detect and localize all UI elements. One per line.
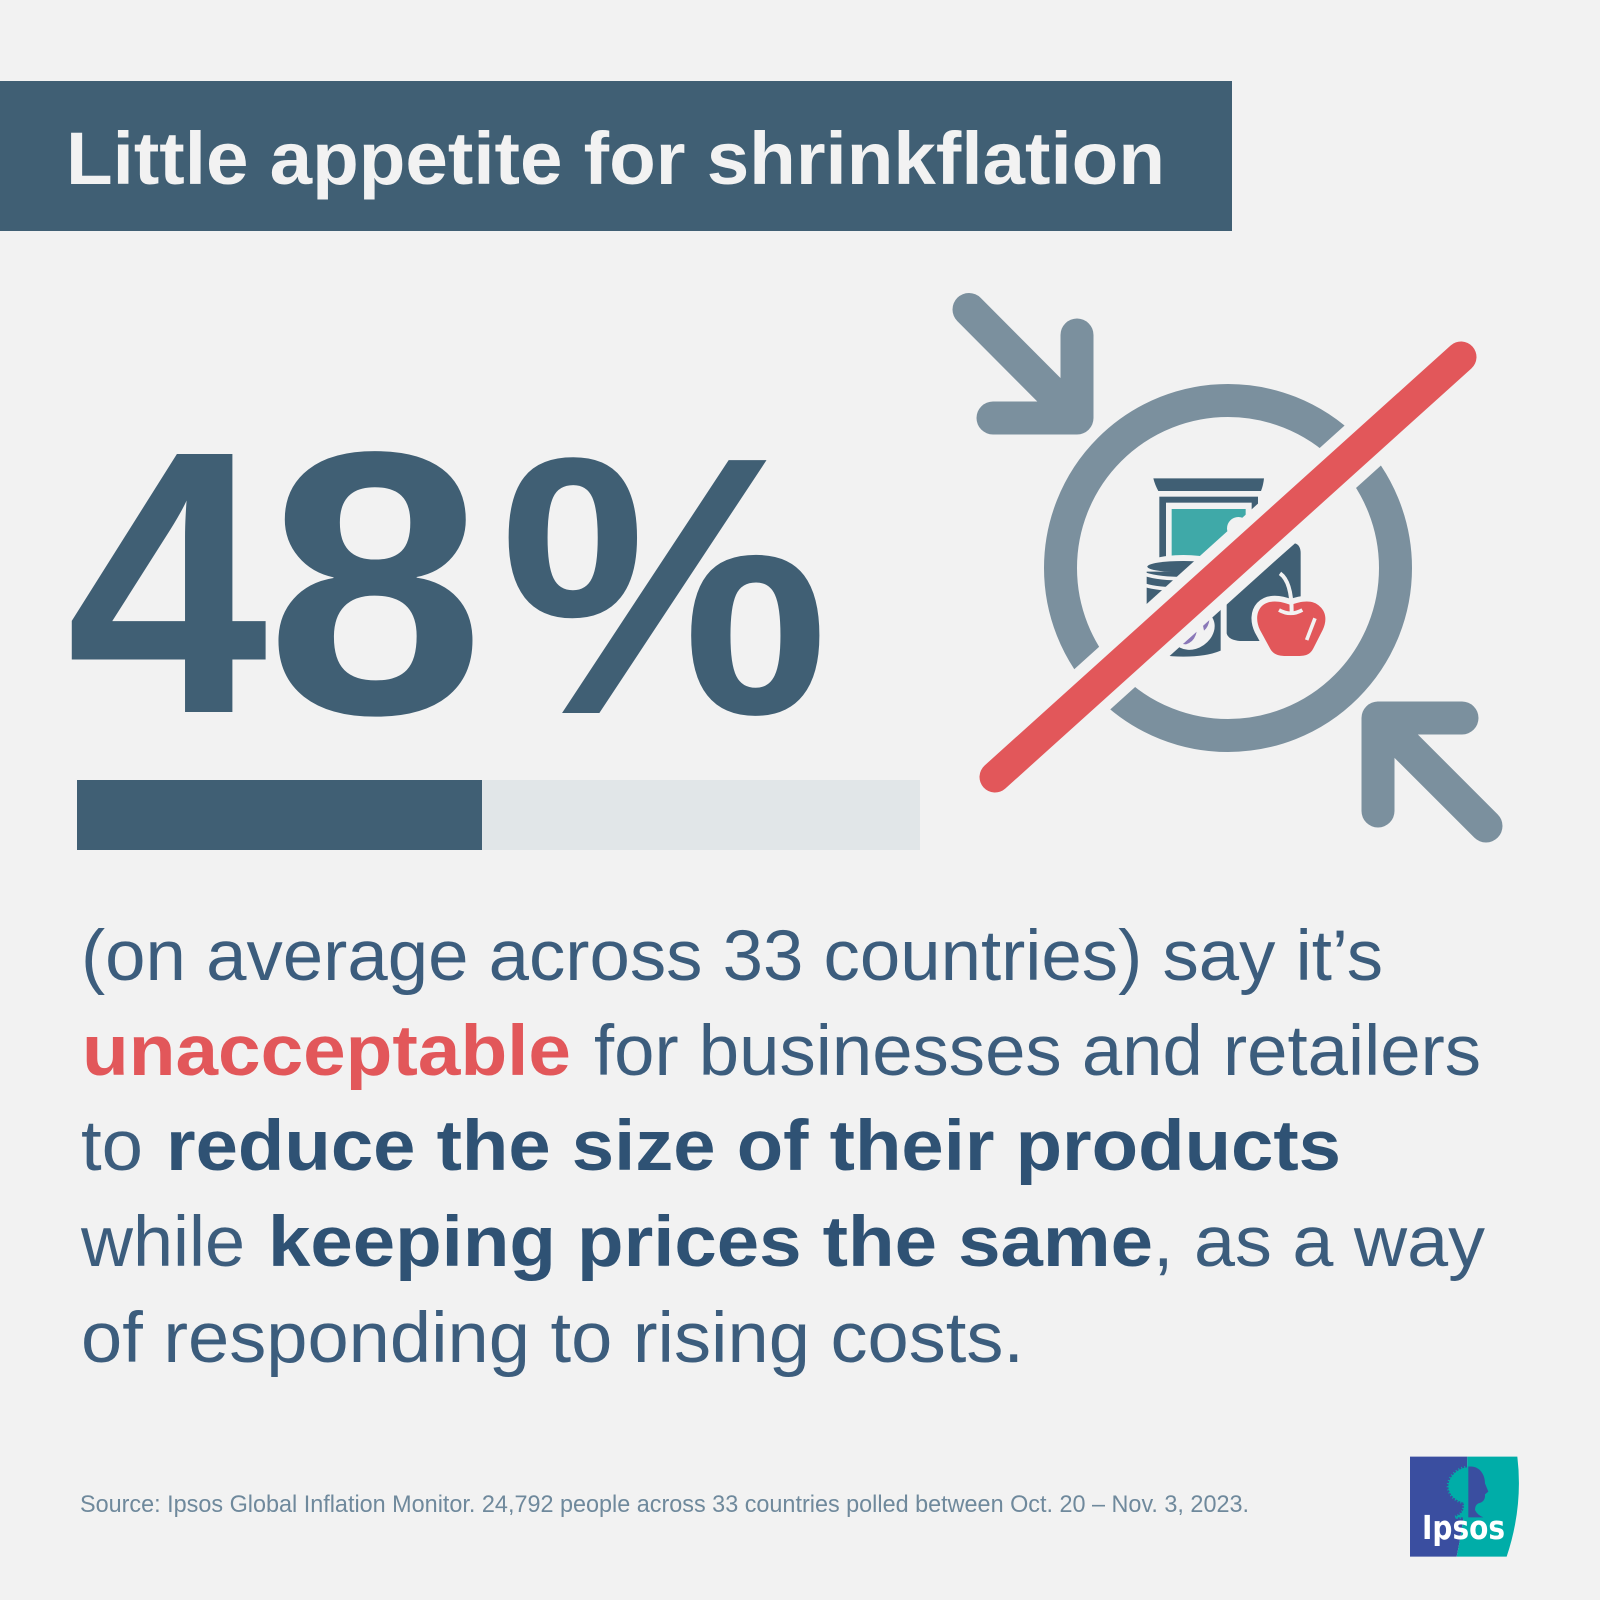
groceries bbox=[1143, 478, 1325, 658]
source note: Source: Ipsos Global Inflation Monitor. 24,792 people across 33 countries polled between Oct. 20 – Nov. 3, 2023. bbox=[80, 1491, 1249, 1518]
body text: reduce the size of their products bbox=[166, 1107, 1341, 1186]
logo: Ipsos: Ipsos bbox=[1422, 1508, 1505, 1547]
body text: , as a way bbox=[1153, 1203, 1486, 1282]
ring bbox=[1060, 400, 1396, 736]
body text: of responding to rising costs. bbox=[81, 1299, 1024, 1378]
progress bar: 48 percent bbox=[77, 780, 920, 850]
body text: unacceptable bbox=[82, 1012, 571, 1091]
headline statistic: 48% bbox=[66, 373, 829, 793]
title banner: Little appetite for shrinkflation bbox=[66, 117, 1165, 200]
body text bbox=[80, 917, 1486, 1378]
prohibition slash bbox=[995, 357, 1461, 777]
body text: to bbox=[81, 1107, 143, 1186]
body text: (on average across 33 countries) say it’s bbox=[81, 917, 1383, 996]
body text: for businesses and retailers bbox=[594, 1012, 1481, 1091]
logo: Ipsos bbox=[1410, 1457, 1519, 1557]
arrow: bottom right pointing inward bbox=[1378, 718, 1486, 826]
body text: while bbox=[80, 1203, 245, 1282]
headline statistic: 48%: 4 bbox=[66, 373, 270, 792]
title banner bbox=[0, 81, 1232, 231]
icon: shrinking groceries crossed out bbox=[969, 310, 1486, 826]
body text: keeping prices the same bbox=[268, 1203, 1153, 1282]
headline statistic: 48%: % bbox=[499, 382, 829, 792]
headline statistic: 48%: 8 bbox=[266, 374, 485, 793]
arrow: top left pointing inward bbox=[969, 310, 1077, 418]
